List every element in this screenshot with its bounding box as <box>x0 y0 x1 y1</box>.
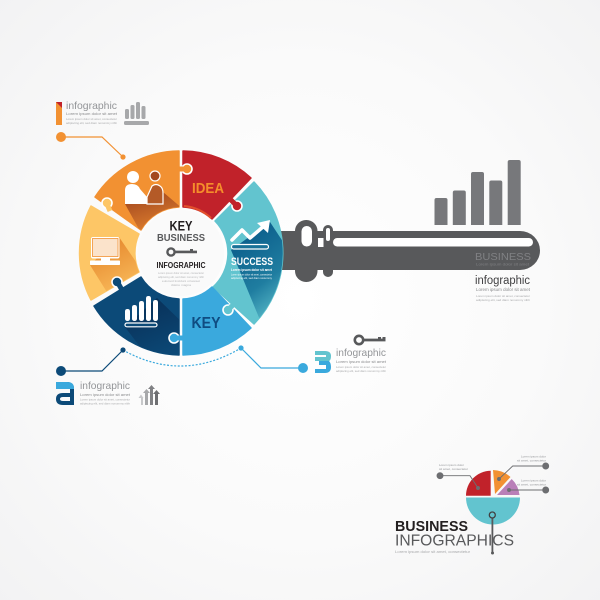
segment: cyan success: Lorem ipsum dolor sit amet, consectetur <box>231 272 272 276</box>
centre label: KEY <box>170 218 192 234</box>
segment: cyan success: adipiscing elit, sed diam nonummy <box>231 276 273 280</box>
segment: cyan success: Lorem ipsum dolor sit amet <box>231 268 273 272</box>
pie chart badge: sit amet, consectetur <box>439 467 468 471</box>
puzzle knobs <box>102 164 242 343</box>
title: business infographics: INFOGRAPHICS <box>395 532 514 550</box>
pie chart badge: sit amet, consectetur <box>517 482 546 486</box>
bar chart above key <box>434 160 521 225</box>
callout 1 orange: Lorem ipsum dolor sit amet, consectetur <box>66 117 117 121</box>
centre label: Lorem ipsum dolor sit amet, consectetur <box>158 271 204 275</box>
centre label: adipiscing elit, sed diam nonummy nibh <box>158 275 205 279</box>
centre label <box>138 210 224 296</box>
centre label: euismod tincidunt ut laoreet <box>162 279 200 283</box>
callout 3 blue: Lorem ipsum dolor sit amet <box>336 360 386 364</box>
centre label: BUSINESS <box>157 232 205 244</box>
callout 2 navy: adipiscing elit, sed diam nonummy nibh <box>80 402 130 406</box>
segment: blue key: KEY <box>192 315 221 332</box>
centre label: dolore magna <box>171 283 192 287</box>
dashed connector <box>123 348 241 366</box>
title: business infographics <box>395 519 514 554</box>
text block: key infographic: adipiscing elit, sed diam nonummy nibh <box>476 298 530 302</box>
text block: key infographic: infographic <box>475 275 530 287</box>
pie chart badge: Lorem ipsum dolor <box>439 463 464 467</box>
callout 1 orange: Lorem ipsum dolor sit amet <box>66 112 117 116</box>
pie chart badge: Lorem ipsum dolor <box>521 478 546 482</box>
segment: cyan success <box>212 181 284 325</box>
title: business infographics: Lorem ipsum dolor sit amet, consectetur <box>395 550 471 554</box>
callout 2 navy <box>56 347 160 406</box>
key shaft <box>278 220 540 282</box>
segment: red idea <box>183 151 251 219</box>
callout 2 navy: Lorem ipsum dolor sit amet, consectetur <box>80 398 130 402</box>
knob necks <box>107 169 237 338</box>
callout 2 navy: infographic <box>80 380 130 392</box>
callout 1 orange: adipiscing elit, sed diam nonummy nibh <box>66 121 117 125</box>
callout 3 blue: infographic <box>336 347 386 359</box>
title: business infographics: BUSINESS <box>395 519 468 535</box>
segment: red idea: IDEA <box>192 181 224 197</box>
segment: orange people <box>94 150 180 231</box>
key stem on pie <box>488 510 497 556</box>
key shaft: Lorem ipsum dolor sit amet <box>476 262 529 266</box>
segment: yellow computer <box>80 206 145 305</box>
key shaft: BUSINESS <box>475 251 531 263</box>
puzzle wheel <box>80 151 295 360</box>
pie chart badge: Lorem ipsum dolor <box>521 454 546 458</box>
pie chart badge: sit amet, consectetur <box>517 458 546 462</box>
segment: cyan success: SUCCESS <box>231 256 273 268</box>
callout 3 blue <box>238 336 386 373</box>
segment: blue key <box>183 287 251 355</box>
pie chart badge <box>437 454 549 524</box>
callout 1 orange: infographic <box>66 100 117 112</box>
centre label: INFOGRAPHIC <box>156 261 206 270</box>
text block: key infographic: Lorem ipsum dolor sit amet <box>476 287 531 292</box>
text block: key infographic <box>475 275 531 302</box>
callout 3 blue: Lorem ipsum dolor sit amet, consectetur <box>336 365 386 369</box>
callout 3 blue: adipiscing elit, sed diam nonummy nibh <box>336 369 386 373</box>
callout 2 navy: Lorem ipsum dolor sit amet <box>80 393 130 397</box>
callout 1 orange <box>56 100 149 160</box>
segment: navy chart <box>94 277 185 360</box>
text block: key infographic: Lorem ipsum dolor sit amet, consectetur <box>476 294 530 298</box>
